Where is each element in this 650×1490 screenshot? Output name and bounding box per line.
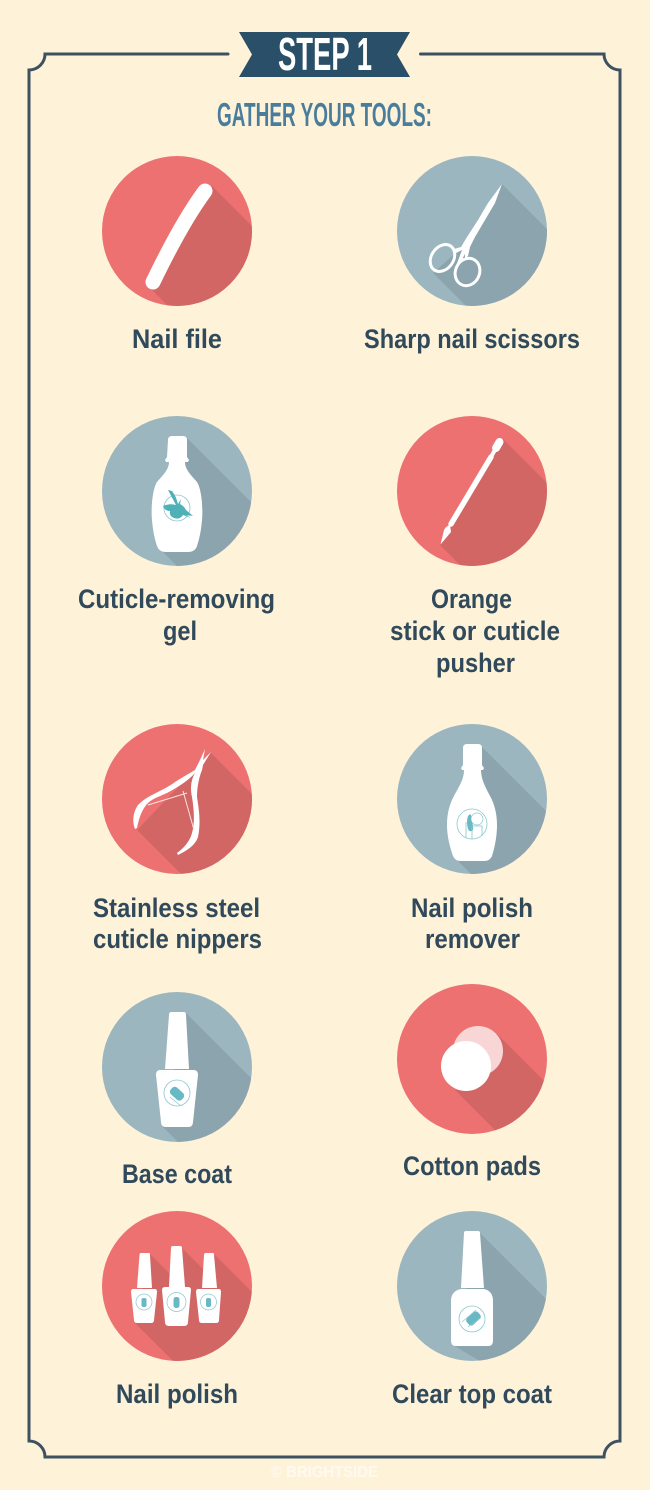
icon: cotton pads bbox=[441, 1026, 503, 1091]
icon: cuticle stick bbox=[440, 442, 500, 544]
heading: GATHER YOUR TOOLS: bbox=[217, 96, 432, 133]
label bbox=[93, 893, 262, 954]
icon: scissors bbox=[425, 184, 502, 290]
icon: gel bottle bbox=[152, 436, 202, 552]
item: nail file bbox=[102, 156, 252, 348]
step ribbon: STEP 1 bbox=[278, 28, 372, 80]
step ribbon bbox=[239, 28, 410, 80]
copyright: © BRIGHTSIDE bbox=[271, 1464, 378, 1481]
label: Nail polish bbox=[116, 1379, 238, 1409]
icon: top coat bottle bbox=[451, 1231, 493, 1346]
item: scissors bbox=[364, 156, 579, 354]
item: polish remover bbox=[397, 724, 547, 948]
item: cotton pads bbox=[397, 984, 547, 1180]
item: nail polish bbox=[102, 1211, 252, 1408]
label: Stainless steel bbox=[93, 893, 260, 923]
label bbox=[411, 893, 533, 954]
label: remover bbox=[425, 924, 520, 954]
item: clear top coat bbox=[393, 1211, 552, 1408]
icon: remover bottle bbox=[447, 744, 497, 861]
icon: three polish bottles bbox=[131, 1246, 221, 1326]
label: Cuticle-removing bbox=[78, 584, 275, 614]
label: Sharp nail scissors bbox=[364, 324, 580, 354]
label: Clear top coat bbox=[392, 1379, 552, 1409]
label: stick or cuticle bbox=[390, 616, 560, 646]
label: Base coat bbox=[122, 1159, 232, 1189]
item: cuticle gel bbox=[78, 416, 287, 652]
label: Nail polish bbox=[411, 893, 533, 923]
label bbox=[390, 584, 560, 678]
label: cuticle nippers bbox=[93, 924, 262, 954]
icon: nippers bbox=[133, 749, 211, 855]
item: base coat bbox=[102, 992, 252, 1184]
label: gel bbox=[163, 616, 197, 646]
label: Nail file bbox=[132, 324, 222, 354]
label: pusher bbox=[436, 648, 515, 678]
icon: nail file bbox=[153, 191, 205, 282]
item: cuticle nippers bbox=[94, 724, 261, 954]
label: Cotton pads bbox=[403, 1151, 541, 1181]
item: orange stick bbox=[390, 416, 560, 678]
label: Orange bbox=[431, 584, 512, 614]
icon: base coat bottle bbox=[156, 1012, 198, 1127]
label bbox=[78, 584, 275, 646]
